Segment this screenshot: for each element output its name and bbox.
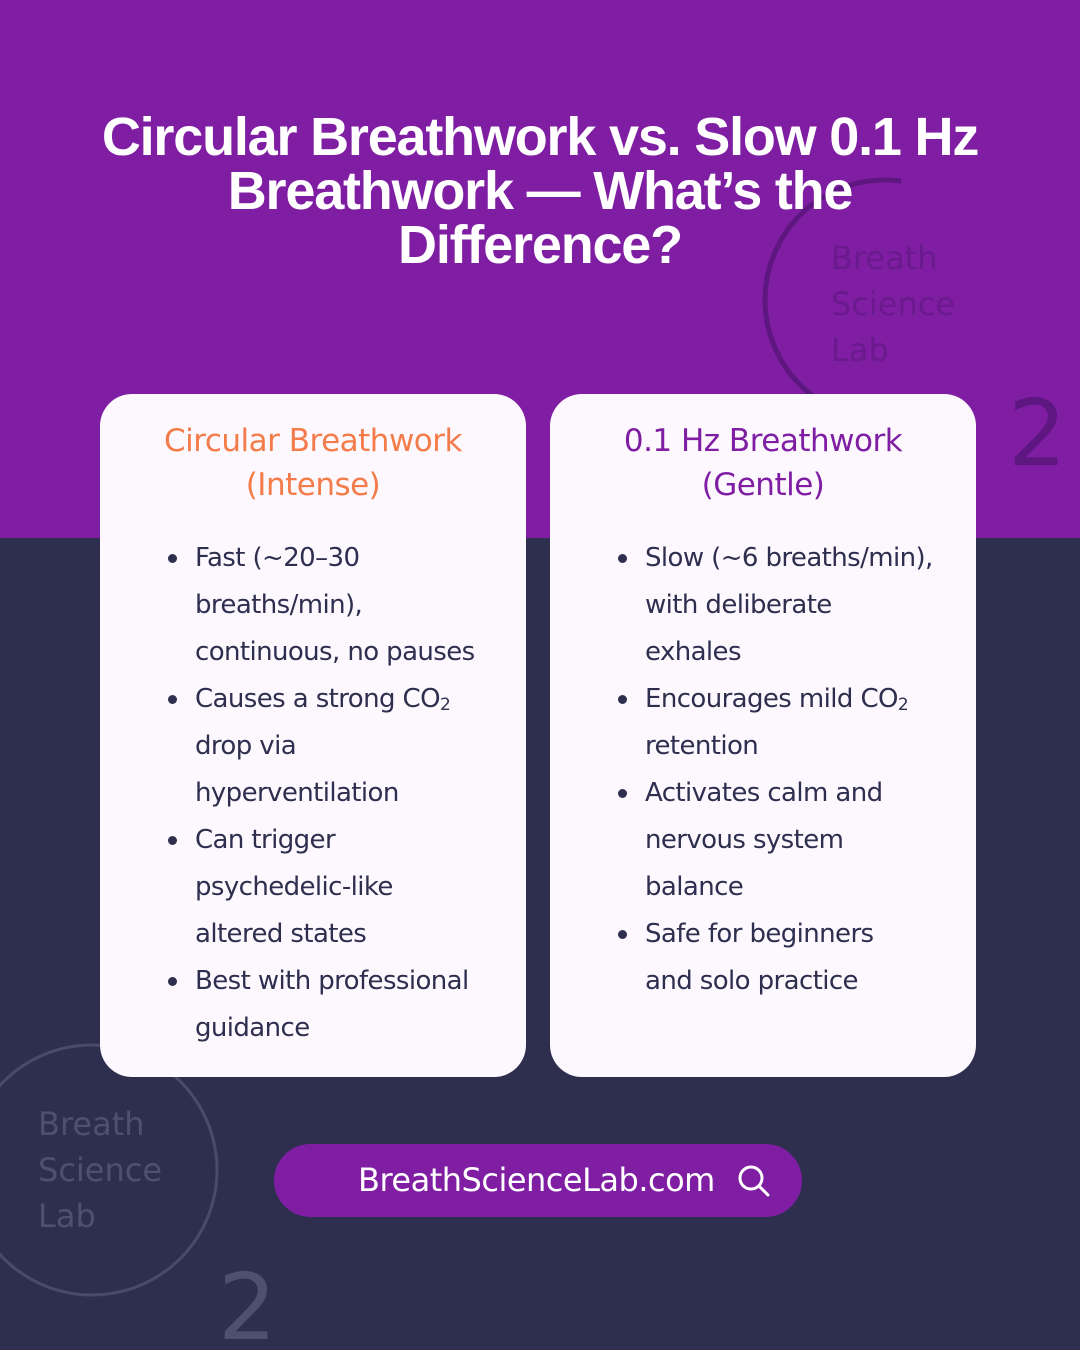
bullet list: 0.1 Hz: Slow (~6 breaths/min), [645, 543, 933, 573]
bullet list: 0.1 Hz [618, 543, 933, 996]
bullet list: circular: guidance [195, 1013, 310, 1043]
heading: circular: Circular Breathwork [164, 423, 462, 459]
watermark: top right: Breath [831, 239, 938, 277]
bullet list: 0.1 Hz: balance [645, 872, 743, 902]
bullet list: circular: Best with professional [195, 966, 469, 996]
title: Breathwork — What’s the [228, 161, 852, 221]
watermark: bottom left [0, 1044, 277, 1350]
website pill [274, 1144, 802, 1217]
bullet list: circular: psychedelic-like [195, 872, 393, 902]
bullet list: circular: breaths/min), [195, 590, 362, 620]
title: Difference? [398, 215, 682, 275]
heading: circular: (Intense) [246, 467, 380, 503]
panel: circular breathwork [100, 394, 526, 1077]
title [102, 107, 978, 275]
heading: 0.1 Hz: (Gentle) [702, 467, 824, 503]
title: Circular Breathwork vs. Slow 0.1 Hz [102, 107, 978, 167]
bullet list: circular: Can trigger [195, 825, 335, 855]
watermark: bottom left: Breath [38, 1105, 145, 1143]
watermark: bottom left: Science [38, 1151, 162, 1189]
watermark: top right: Science [831, 285, 955, 323]
bullet list: circular: Fast (~20–30 [195, 543, 359, 573]
heading: circular [164, 423, 462, 503]
bullet list: 0.1 Hz: with deliberate [645, 590, 832, 620]
watermark: top right: Lab [831, 331, 889, 369]
bullet list: circular [168, 543, 475, 1043]
watermark: top right: 2 [1008, 380, 1067, 487]
panel: 0.1 Hz breathwork [550, 394, 976, 1077]
bullet list: 0.1 Hz: exhales [645, 637, 741, 667]
bullet list: 0.1 Hz: nervous system [645, 825, 843, 855]
bullet list: 0.1 Hz: retention [645, 731, 758, 761]
bullet list: circular: drop via [195, 731, 296, 761]
bullet list: 0.1 Hz: Encourages mild CO2 [645, 684, 908, 715]
icon: search [738, 1166, 770, 1197]
bullet list: circular: hyperventilation [195, 778, 399, 808]
bullet list: circular: altered states [195, 919, 366, 949]
watermark: top right [762, 178, 1067, 487]
bullet list: 0.1 Hz: Activates calm and [645, 778, 883, 808]
website pill: BreathScienceLab.com [358, 1161, 715, 1199]
watermark: bottom left: Lab [38, 1197, 96, 1235]
bullet list: circular: Causes a strong CO2 [195, 684, 450, 715]
bullet list: circular: continuous, no pauses [195, 637, 475, 667]
bullet list: 0.1 Hz: and solo practice [645, 966, 858, 996]
heading: 0.1 Hz [624, 423, 902, 503]
heading: 0.1 Hz: 0.1 Hz Breathwork [624, 423, 902, 459]
bullet list: 0.1 Hz: Safe for beginners [645, 919, 873, 949]
